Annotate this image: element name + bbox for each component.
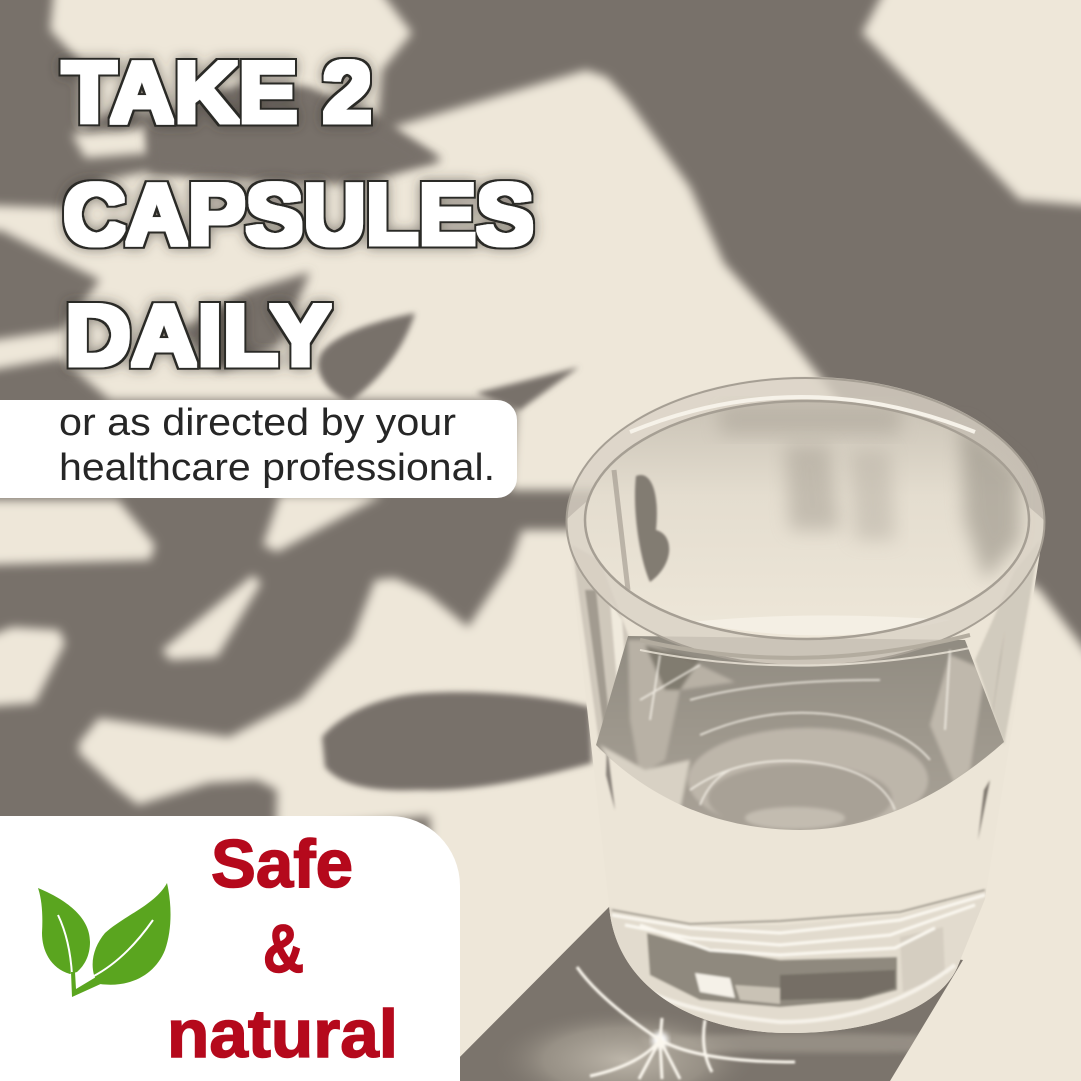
heading line 3: DAILY <box>65 288 331 384</box>
heading line 2: CAPSULES <box>63 167 534 263</box>
safe and natural text: natural <box>167 996 398 1072</box>
dosage note text: or as directed by your <box>59 402 456 444</box>
heading <box>62 45 534 384</box>
heading line 1: TAKE 2 <box>62 45 372 141</box>
glass body <box>568 502 1044 1033</box>
rim of glass <box>566 377 1045 666</box>
dosage note panel <box>0 400 517 498</box>
icon: green leaves <box>38 883 171 997</box>
light surface bottom edge <box>880 1050 1081 1081</box>
glass of water <box>566 376 1046 1033</box>
inner reflections <box>785 445 840 530</box>
safe and natural text: Safe <box>211 826 353 902</box>
dosage note text: healthcare professional. <box>59 447 495 489</box>
shadow: glass cast shadow with light rays <box>436 900 966 1081</box>
glass base ridges and thick bottom <box>600 890 990 1040</box>
side wall reflections <box>572 540 1040 840</box>
safe and natural text: & <box>263 911 304 987</box>
shadow: small leaves over light <box>318 313 592 790</box>
water surface <box>596 636 1004 830</box>
dosage note text <box>59 402 495 489</box>
rim opening <box>585 401 1029 639</box>
shadow: upper middle leaf <box>145 85 441 372</box>
panel: safe and natural <box>0 816 460 1081</box>
safe and natural text <box>167 826 398 1072</box>
